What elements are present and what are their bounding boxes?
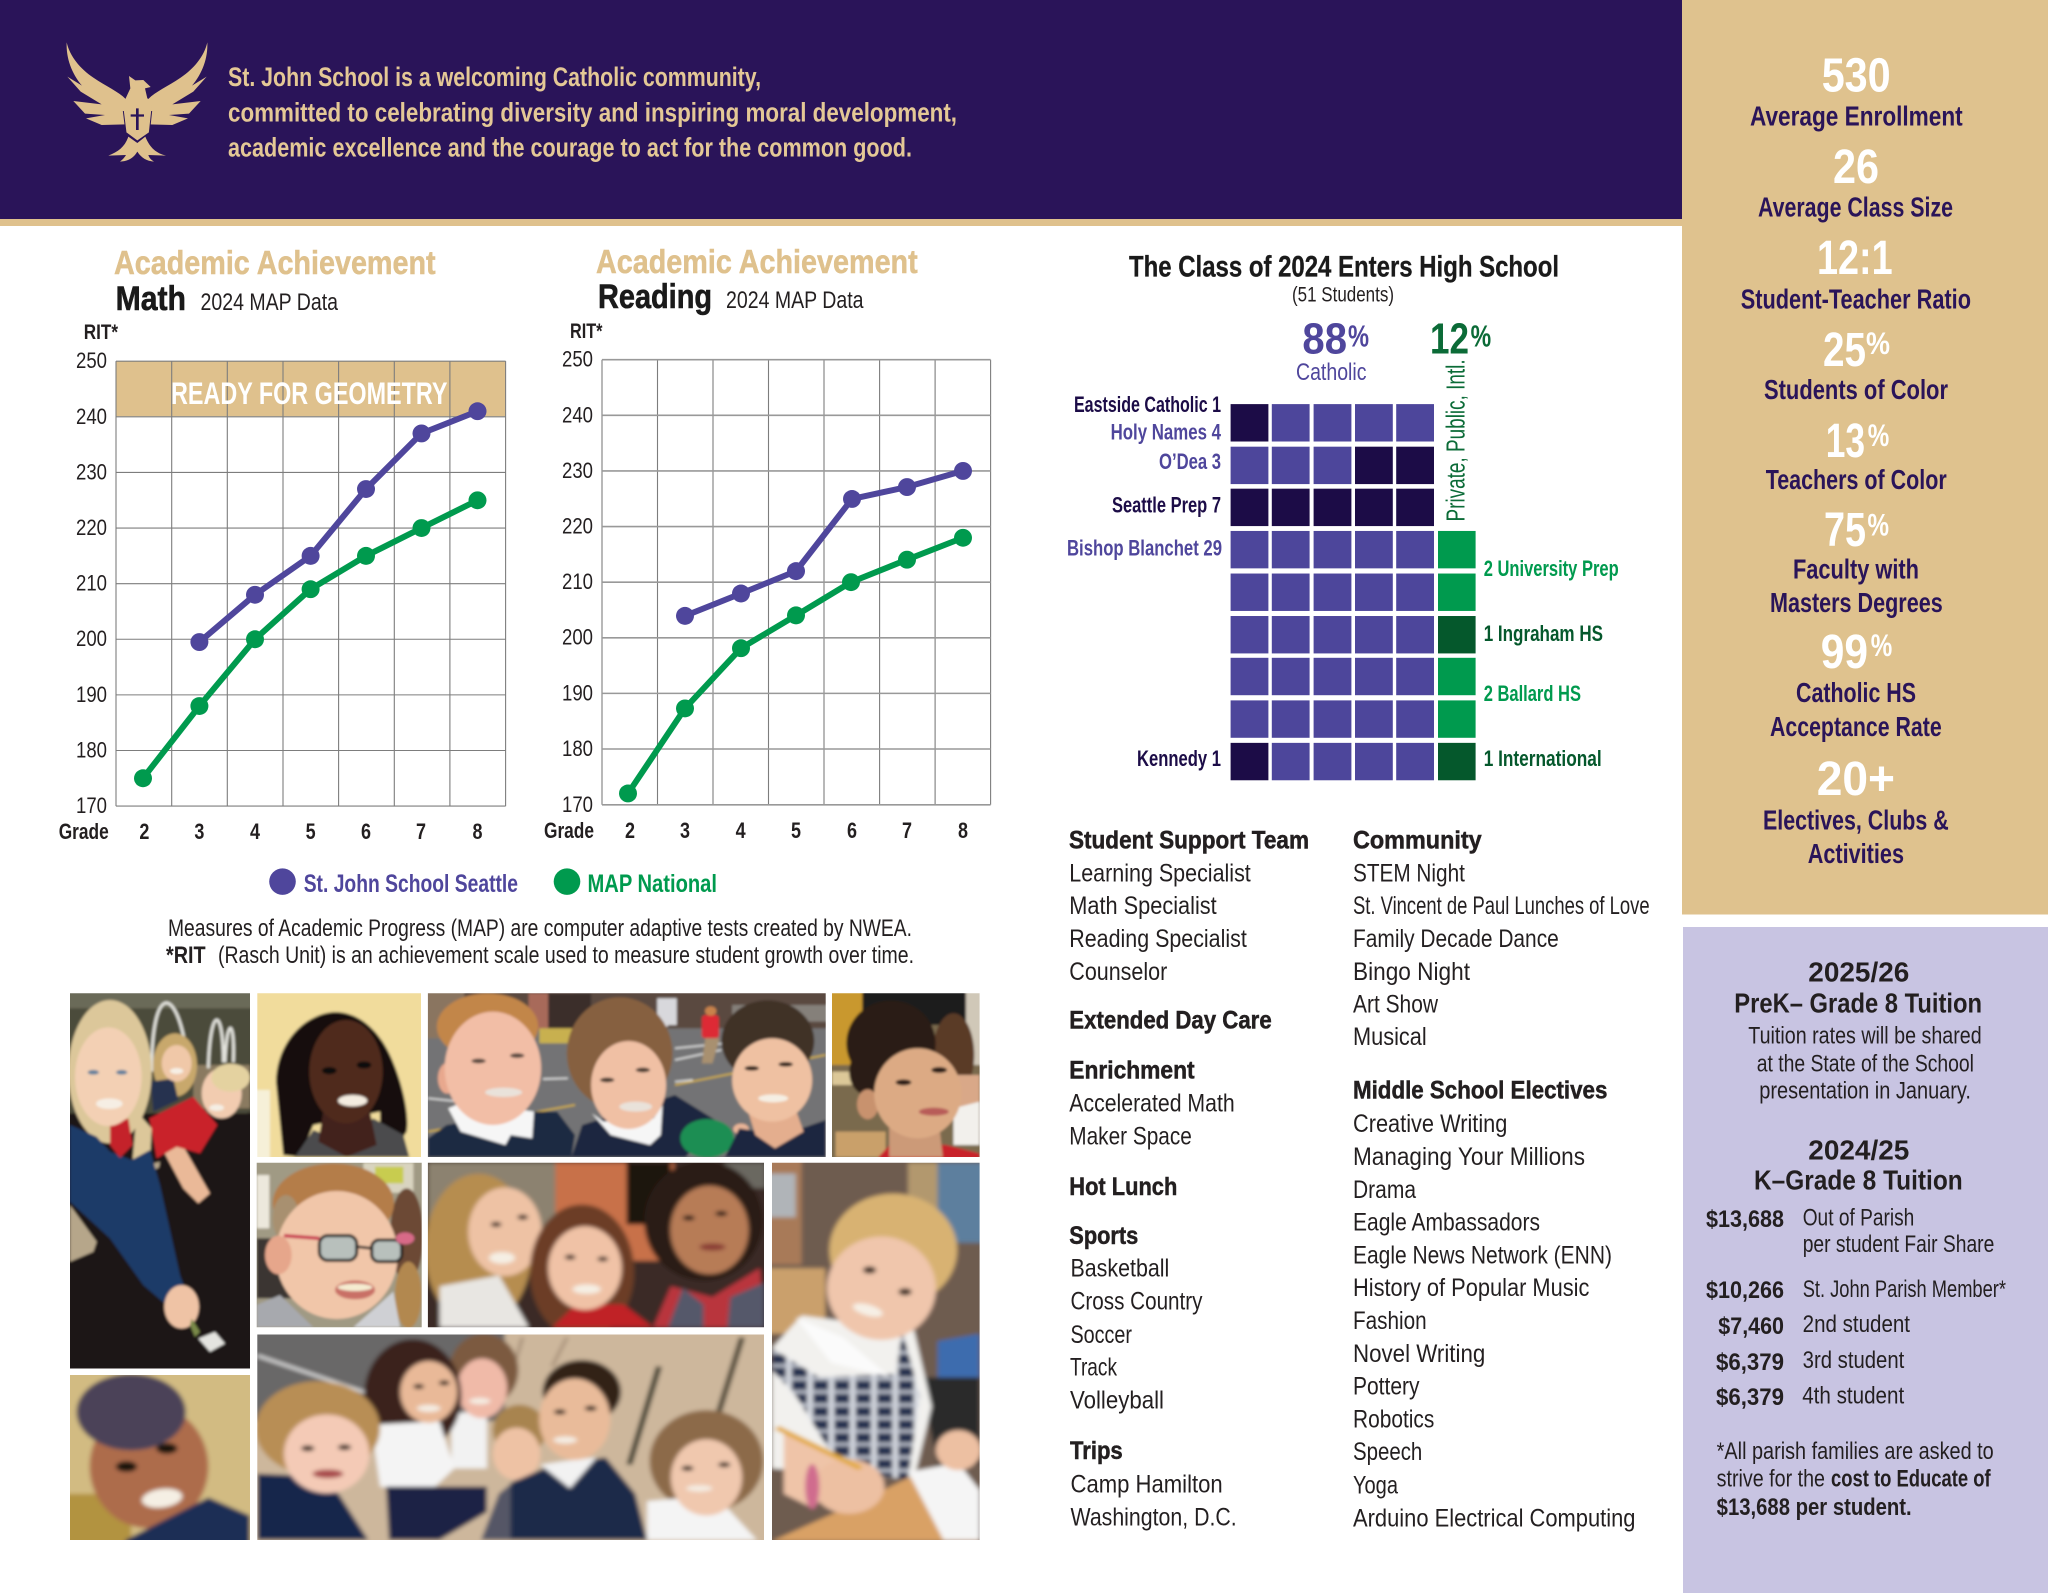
tuition table: $7,460 bbox=[1718, 1313, 1784, 1340]
photo: children gardening bbox=[70, 993, 250, 1368]
tuition note bbox=[1748, 1023, 1982, 1105]
chart legend bbox=[269, 868, 717, 898]
axis: RIT scale: 220 bbox=[76, 515, 107, 540]
axis: grades: 7 bbox=[416, 819, 426, 844]
heading: class of 2024: (51 Students) bbox=[1292, 284, 1394, 307]
axis: grades: 3 bbox=[194, 819, 204, 844]
list: trips: Camp Hamilton bbox=[1070, 1470, 1223, 1498]
list: sports: Volleyball bbox=[1070, 1386, 1164, 1414]
stat: 88% Catholic: 88 bbox=[1302, 314, 1347, 363]
list: enrichment: Maker Space bbox=[1069, 1123, 1192, 1151]
axis: RIT scale: 230 bbox=[562, 458, 593, 483]
labels: other high schools: 2 Ballard HS bbox=[1484, 681, 1581, 706]
heading: 2024/25 tuition: K–Grade 8 Tuition bbox=[1754, 1165, 1963, 1196]
stat: 88% Catholic bbox=[1296, 314, 1369, 386]
list: middle school electives: Middle School Electives bbox=[1353, 1077, 1607, 1105]
heading: 2025/26 tuition: PreK– Grade 8 Tuition bbox=[1734, 987, 1982, 1018]
stat: class size bbox=[1758, 141, 1953, 222]
list: sports: Soccer bbox=[1070, 1321, 1132, 1349]
list: middle school electives: Pottery bbox=[1353, 1373, 1420, 1401]
stat: acceptance rate: % bbox=[1871, 627, 1892, 663]
axis: RIT scale: 210 bbox=[76, 571, 107, 596]
list: middle school electives: Fashion bbox=[1353, 1307, 1427, 1335]
stat: electives bbox=[1763, 753, 1949, 869]
stat: teachers of color: % bbox=[1868, 417, 1889, 453]
list: community: Art Show bbox=[1353, 991, 1439, 1018]
photo: girl with braids bbox=[257, 993, 421, 1157]
list: student support team: Counselor bbox=[1069, 958, 1167, 986]
tuition table: 3rd student bbox=[1803, 1347, 1905, 1374]
stat: enrollment bbox=[1750, 50, 1963, 131]
panel: tuition bbox=[1683, 927, 2048, 1593]
axis: grades: 7 bbox=[902, 818, 912, 843]
stat: 12% private public international: Private, Public, Intl. bbox=[1442, 359, 1471, 522]
list: middle school electives: Novel Writing bbox=[1353, 1340, 1485, 1368]
stat: electives: 20+ bbox=[1817, 753, 1895, 806]
stat: ratio bbox=[1741, 232, 1971, 314]
labels: Catholic high schools: Bishop Blanchet 29 bbox=[1067, 536, 1222, 561]
parish footnote: strive for the bbox=[1717, 1466, 1825, 1493]
list: student support team bbox=[1069, 827, 1309, 986]
list: sports: Cross Country bbox=[1070, 1288, 1203, 1316]
list: trips: Trips bbox=[1070, 1437, 1123, 1465]
stat: 88% Catholic: % bbox=[1348, 318, 1369, 353]
header banner bbox=[0, 0, 1682, 226]
parish footnote: $13,688 per student. bbox=[1717, 1494, 1912, 1521]
heading: class of 2024 bbox=[1129, 251, 1559, 307]
MAP explanation caption: *RIT bbox=[166, 942, 206, 969]
line: MAP national reading bbox=[619, 529, 972, 802]
photo: girl writing at desk bbox=[772, 1162, 980, 1540]
heading: hot lunch: Hot Lunch bbox=[1069, 1173, 1177, 1201]
heading: math chart: Math bbox=[116, 280, 186, 318]
list: sports: Track bbox=[1070, 1353, 1117, 1381]
list: community: Bingo Night bbox=[1353, 958, 1470, 986]
photo: three girls bbox=[428, 1162, 764, 1328]
heading: reading chart: Academic Achievement bbox=[596, 243, 918, 280]
axis: grades: 8 bbox=[958, 818, 968, 843]
stat: acceptance rate: 99 bbox=[1821, 626, 1868, 679]
photo: three boys in uniform bbox=[428, 993, 826, 1157]
axis: grades: 6 bbox=[361, 819, 371, 844]
tuition table: $6,379 bbox=[1716, 1384, 1784, 1411]
mission statement: committed to celebrating diversity and inspiring moral development, bbox=[228, 98, 957, 128]
parish footnote: *All parish families are asked to bbox=[1717, 1438, 1994, 1465]
heading: 2024/25 tuition bbox=[1754, 1135, 1963, 1196]
stat: acceptance rate: Acceptance Rate bbox=[1770, 711, 1942, 742]
axis: RIT scale: 170 bbox=[76, 793, 107, 818]
axis: RIT scale: 250 bbox=[562, 347, 593, 372]
heading: reading chart bbox=[596, 243, 918, 316]
panel: school statistics bbox=[1682, 0, 2048, 914]
heading: class of 2024: The Class of 2024 Enters High School bbox=[1129, 251, 1559, 284]
photo: smiling boy with curly hair bbox=[70, 1375, 250, 1540]
MAP explanation caption: (Rasch Unit) is an achievement scale used to measure student growth over time. bbox=[218, 942, 914, 969]
stat: electives: Activities bbox=[1808, 838, 1904, 869]
axis: grades: 3 bbox=[680, 818, 690, 843]
list: middle school electives: Eagle Ambassadors bbox=[1353, 1208, 1540, 1236]
tuition table: 2nd student bbox=[1803, 1311, 1910, 1338]
heading: math chart: 2024 MAP Data bbox=[200, 289, 339, 316]
axis: grades: 8 bbox=[472, 819, 482, 844]
labels: Catholic high schools: Kennedy 1 bbox=[1137, 746, 1221, 771]
parish footnote: cost to Educate of bbox=[1831, 1466, 1991, 1493]
stat: 12% private public international bbox=[1430, 314, 1491, 522]
MAP explanation caption bbox=[166, 915, 914, 969]
list: middle school electives: Managing Your Millions bbox=[1353, 1143, 1585, 1171]
stat: students of color: % bbox=[1866, 325, 1890, 361]
axis: grades: 6 bbox=[847, 818, 857, 843]
list: community: St. Vincent de Paul Lunches of Love bbox=[1353, 892, 1650, 920]
axis: grades: 5 bbox=[791, 818, 801, 843]
list: enrichment bbox=[1069, 1056, 1235, 1151]
stat: 88% Catholic: Catholic bbox=[1296, 359, 1367, 386]
list: middle school electives: Drama bbox=[1353, 1176, 1416, 1204]
mission statement bbox=[228, 62, 957, 162]
heading: math chart bbox=[114, 244, 436, 318]
stat: electives: Electives, Clubs & bbox=[1763, 804, 1949, 835]
stat: 12% private public international: % bbox=[1471, 318, 1491, 353]
list: sports: Basketball bbox=[1070, 1255, 1169, 1283]
parish footnote bbox=[1717, 1438, 1994, 1521]
axis: RIT scale: 180 bbox=[76, 738, 107, 762]
labels: other high schools bbox=[1484, 556, 1619, 771]
stat: enrollment: Average Enrollment bbox=[1750, 101, 1963, 131]
axis: RIT scale bbox=[76, 321, 119, 818]
line: St. John reading bbox=[676, 462, 972, 625]
stat: ratio: 12:1 bbox=[1817, 232, 1893, 285]
list: trips: Washington, D.C. bbox=[1070, 1503, 1237, 1531]
axis: RIT scale: RIT* bbox=[570, 320, 603, 343]
list: middle school electives: History of Popular Music bbox=[1353, 1274, 1589, 1302]
list: middle school electives bbox=[1353, 1077, 1636, 1532]
axis: grades: Grade bbox=[59, 819, 109, 844]
tuition table: per student Fair Share bbox=[1803, 1231, 1994, 1258]
labels: Catholic high schools: Seattle Prep 7 bbox=[1112, 493, 1221, 518]
list: student support team: Math Specialist bbox=[1069, 892, 1217, 920]
line: MAP national math bbox=[134, 491, 486, 787]
axis: RIT scale: 200 bbox=[562, 625, 593, 650]
stat: students of color bbox=[1764, 324, 1948, 405]
stat: acceptance rate: Catholic HS bbox=[1796, 677, 1916, 708]
axis: RIT scale: 230 bbox=[76, 459, 107, 484]
axis: RIT scale: 190 bbox=[76, 682, 107, 707]
list: middle school electives: Yoga bbox=[1353, 1471, 1398, 1499]
tuition table: $10,266 bbox=[1706, 1277, 1784, 1304]
axis: RIT scale: 220 bbox=[562, 514, 593, 538]
axis: grades: 2 bbox=[139, 819, 149, 844]
axis: RIT scale: 200 bbox=[76, 626, 107, 651]
heading: reading chart: Reading bbox=[598, 278, 712, 316]
chart: math line chart bbox=[59, 321, 506, 844]
list: programs column one bbox=[1069, 827, 1309, 1531]
list: community: STEM Night bbox=[1353, 860, 1465, 888]
labels: Catholic high schools: Holy Names 4 bbox=[1111, 420, 1222, 445]
photo collage bbox=[48, 985, 991, 1552]
list: sports bbox=[1069, 1222, 1203, 1414]
mission statement: St. John School is a welcoming Catholic community, bbox=[228, 62, 761, 92]
heading: 2025/26 tuition bbox=[1734, 957, 1982, 1018]
axis: grades bbox=[59, 819, 482, 844]
icon: eagle logo bbox=[67, 42, 207, 162]
axis: grades: 2 bbox=[625, 818, 635, 843]
list: community bbox=[1353, 827, 1650, 1051]
photo: boy with glasses bbox=[256, 1162, 422, 1328]
list: middle school electives: Creative Writing bbox=[1353, 1110, 1507, 1138]
photo: boy with dark hair bbox=[832, 993, 980, 1157]
mission statement: academic excellence and the courage to act for the common good. bbox=[228, 132, 912, 162]
list: middle school electives: Robotics bbox=[1353, 1406, 1434, 1434]
labels: Catholic high schools: Eastside Catholic 1 bbox=[1074, 392, 1221, 417]
axis: RIT scale: 250 bbox=[76, 348, 107, 373]
MAP explanation caption: Measures of Academic Progress (MAP) are computer adaptive tests created by NWEA. bbox=[168, 915, 912, 942]
list: middle school electives: Eagle News Network (ENN) bbox=[1353, 1242, 1612, 1269]
heading: reading chart: 2024 MAP Data bbox=[726, 287, 864, 314]
list: enrichment: Enrichment bbox=[1069, 1056, 1195, 1084]
stat: acceptance rate bbox=[1770, 626, 1942, 742]
stat: teachers of color: Teachers of Color bbox=[1766, 464, 1947, 495]
heading: math chart: Academic Achievement bbox=[114, 244, 436, 281]
labels: other high schools: 1 International bbox=[1484, 746, 1602, 771]
list: community: Family Decade Dance bbox=[1353, 925, 1559, 953]
chart legend: St. John School Seattle bbox=[304, 870, 518, 898]
axis: RIT scale: RIT* bbox=[84, 321, 119, 344]
stat: enrollment: 530 bbox=[1822, 50, 1891, 102]
heading: 2024/25 tuition: 2024/25 bbox=[1808, 1135, 1909, 1166]
axis: RIT scale: 210 bbox=[562, 569, 593, 594]
tuition table: $6,379 bbox=[1716, 1349, 1784, 1376]
stat: faculty masters: 75 bbox=[1824, 504, 1866, 557]
list: middle school electives: Arduino Electrical Computing bbox=[1353, 1504, 1635, 1532]
tuition note: presentation in January. bbox=[1759, 1078, 1971, 1105]
axis: RIT scale bbox=[562, 320, 603, 817]
stat: students of color: 25 bbox=[1823, 324, 1866, 377]
stat: faculty masters: Faculty with bbox=[1793, 553, 1919, 584]
photo: group of six students bbox=[257, 1334, 764, 1540]
list: programs column two bbox=[1353, 827, 1650, 1532]
axis: RIT scale: 240 bbox=[76, 404, 107, 429]
label: ready for geometry: READY FOR GEOMETRY bbox=[171, 375, 448, 411]
line: St. John math bbox=[190, 402, 486, 651]
list: enrichment: Accelerated Math bbox=[1069, 1090, 1235, 1117]
list: middle school electives: Speech bbox=[1353, 1438, 1422, 1466]
tuition table: Out of Parish bbox=[1803, 1205, 1914, 1232]
stat: teachers of color: 13 bbox=[1826, 415, 1865, 468]
axis: RIT scale: 180 bbox=[562, 736, 593, 761]
axis: grades: 4 bbox=[250, 819, 261, 844]
chart legend: MAP National bbox=[588, 870, 717, 898]
tuition table: 4th student bbox=[1802, 1382, 1905, 1409]
list: community: Musical bbox=[1353, 1023, 1427, 1051]
list: student support team: Learning Specialist bbox=[1069, 860, 1251, 888]
stat: faculty masters: Masters Degrees bbox=[1770, 587, 1943, 618]
chart: reading line chart bbox=[544, 320, 991, 843]
list: trips bbox=[1070, 1437, 1237, 1531]
labels: other high schools: 1 Ingraham HS bbox=[1484, 621, 1603, 646]
heading: 2025/26 tuition: 2025/26 bbox=[1808, 957, 1909, 988]
stat: class size: 26 bbox=[1833, 141, 1879, 194]
tuition table: $13,688 bbox=[1706, 1206, 1784, 1233]
axis: RIT scale: 190 bbox=[562, 680, 593, 705]
stat: faculty masters: % bbox=[1868, 507, 1889, 543]
labels: Catholic high schools: O’Dea 3 bbox=[1159, 449, 1221, 474]
stat: faculty masters bbox=[1770, 504, 1943, 618]
panel: high school placement bbox=[1067, 251, 1619, 780]
axis: grades bbox=[544, 818, 968, 843]
stat: ratio: Student-Teacher Ratio bbox=[1741, 283, 1971, 314]
axis: grades: 5 bbox=[306, 819, 316, 844]
list: student support team: Reading Specialist bbox=[1069, 925, 1247, 953]
list: student support team: Student Support Team bbox=[1069, 827, 1309, 855]
tuition note: at the State of the School bbox=[1757, 1051, 1974, 1078]
tuition table bbox=[1706, 1205, 2006, 1411]
waffle chart: student destinations bbox=[1231, 404, 1476, 780]
tuition note: Tuition rates will be shared bbox=[1748, 1023, 1982, 1050]
axis: RIT scale: 240 bbox=[562, 402, 593, 427]
stat: students of color: Students of Color bbox=[1764, 374, 1948, 405]
labels: Catholic high schools bbox=[1067, 392, 1222, 771]
list: sports: Sports bbox=[1069, 1222, 1138, 1250]
labels: other high schools: 2 University Prep bbox=[1484, 556, 1619, 581]
axis: RIT scale: 170 bbox=[562, 792, 593, 817]
heading: extended day care: Extended Day Care bbox=[1069, 1006, 1272, 1034]
list: community: Community bbox=[1353, 827, 1482, 855]
axis: grades: Grade bbox=[544, 818, 594, 843]
stat: class size: Average Class Size bbox=[1758, 191, 1953, 222]
axis: grades: 4 bbox=[736, 818, 746, 843]
stat: 12% private public international: 12 bbox=[1430, 314, 1469, 363]
stat: teachers of color bbox=[1766, 415, 1947, 495]
